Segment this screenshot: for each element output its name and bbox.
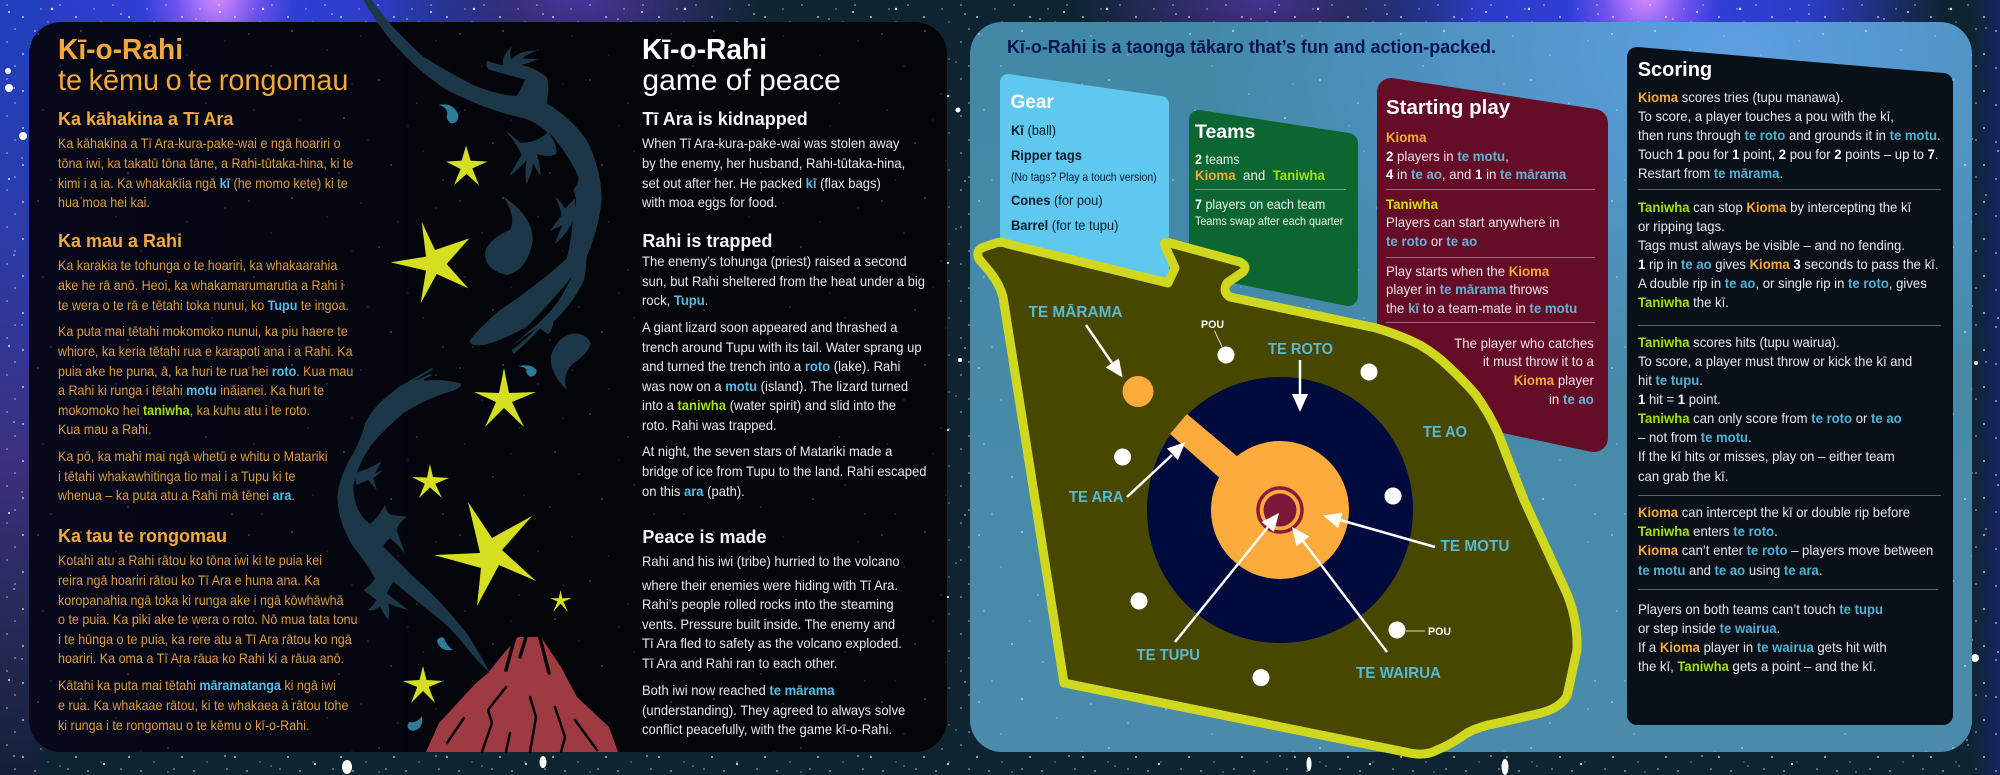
card: gear: Kī (ball) xyxy=(1010,122,1056,138)
card: scoring: Taniwha enters te roto. xyxy=(1638,523,1777,539)
English story text: Tī Ara and Rahi ran to each other. xyxy=(642,655,838,671)
heading: English title xyxy=(642,34,841,97)
card: scoring: Kioma scores tries (tupu manawa). xyxy=(1638,89,1843,105)
English story text: Rahi and his iwi (tribe) hurried to the volcano xyxy=(642,553,900,569)
card: scoring: Scoring xyxy=(1638,59,1712,81)
card: teams xyxy=(1189,110,1358,306)
card: scoring: Touch 1 pou for 1 point, 2 pou for 2 points – up to 7. xyxy=(1638,146,1938,162)
English story text: Tī Ara fled to safety as the volcano exploded. xyxy=(642,635,902,651)
heading: Māori title: Kī-o-Rahi xyxy=(58,34,183,66)
card: scoring: Kioma can’t enter te roto – players move between xyxy=(1638,542,1933,558)
card: starting play xyxy=(1377,78,1608,452)
card: scoring: – not from te motu. xyxy=(1638,429,1751,445)
te tupu centre xyxy=(1264,494,1296,526)
te marama circle xyxy=(1122,376,1154,407)
Māori story text: i te hūnga o te puia, ka rere atu a Tī Ara rātou ko ngā xyxy=(58,631,352,647)
area labels: TE WAIRUA xyxy=(1356,665,1441,682)
te motu island xyxy=(1211,441,1349,579)
heading: Māori title: te kēmu o te rongomau xyxy=(58,64,348,97)
card: starting play: The player who catches xyxy=(1454,334,1594,350)
heading: English title: Kī-o-Rahi xyxy=(642,34,767,66)
English story text: At night, the seven stars of Matariki made a xyxy=(642,443,893,459)
field boundary xyxy=(978,242,1577,754)
Māori story text: Ka tau te rongomau xyxy=(58,526,227,546)
English story text: When Tī Ara-kura-pake-wai was stolen away xyxy=(642,135,900,151)
Māori story text: hua moa hei kai. xyxy=(58,194,150,210)
English story text: where their enemies were hiding with Tī Ara. xyxy=(642,577,898,593)
heading: Māori title xyxy=(58,34,348,97)
card: starting play: Taniwha xyxy=(1386,196,1438,212)
card: starting play: Kioma player xyxy=(1514,372,1594,388)
English story text: Rahi is trapped xyxy=(642,231,772,251)
area labels: TE TUPU xyxy=(1136,647,1200,664)
intro heading: Kī-o-Rahi is a taonga tākaro that’s fun and action-packed. xyxy=(1007,37,1496,57)
heading: English title: game of peace xyxy=(642,64,841,97)
Māori story text: whenua – ka puta atu a Rahi mā tēnei ara. xyxy=(58,487,295,503)
card: starting play: it must throw it to a xyxy=(1483,353,1594,369)
Māori story text: Ka pō, ka mahi mai ngā whetū e whitu o Matariki xyxy=(58,448,328,464)
card: teams: 2 teams xyxy=(1195,151,1240,167)
area labels: TE MOTU xyxy=(1440,538,1510,555)
English story text: trench around Tupu with its tail. Water sprang up xyxy=(642,339,922,355)
stars xyxy=(391,146,572,703)
English story text: Both iwi now reached te mārama xyxy=(642,682,835,698)
Māori story text: te wera o te rā e tētahi toka nunui, ko Tupu te ingoa. xyxy=(58,297,349,313)
illustration: lizards, stars and volcano xyxy=(337,0,618,754)
card: scoring: If a Kioma player in te wairua gets hit with xyxy=(1638,639,1886,655)
Māori story text: e rua. Ka whakaae rātou, ki te whakaea ā rātou tohe xyxy=(58,697,348,713)
card: teams: Teams swap after each quarter xyxy=(1195,214,1343,228)
card: scoring: 1 rip in te ao gives Kioma 3 seconds to pass the kī. xyxy=(1638,256,1938,272)
card: scoring: then runs through te roto and grounds it in te motu. xyxy=(1638,127,1940,143)
area labels: TE ARA xyxy=(1069,489,1124,506)
Māori story text: Kātahi ka puta mai tētahi māramatanga ki ngā iwi xyxy=(58,677,336,693)
Māori story text: koropanahia ngā toka ki runga ake i ngā kōwhāwhā xyxy=(58,592,344,608)
Māori story text: i tētahi whakawhitinga tio mai i a Tupu ki te xyxy=(58,468,296,484)
card: gear xyxy=(1000,74,1169,278)
English story text: rock, Tupu. xyxy=(642,292,709,308)
card: starting play: Kioma xyxy=(1386,129,1426,145)
te roto lake xyxy=(1147,377,1413,643)
Māori story text: ki runga i te rongomau o te kēmu o kī-o-Rahi. xyxy=(58,717,309,733)
English story text: Peace is made xyxy=(642,527,766,547)
Māori story text: Ka kāhakina a Tī Ara xyxy=(58,109,233,129)
card: gear: Cones (for pou) xyxy=(1010,192,1102,208)
pou labels: POU xyxy=(1428,626,1451,638)
card: scoring: hit te tupu. xyxy=(1638,372,1703,388)
left edge glow xyxy=(0,0,42,774)
card: scoring: the kī, Taniwha gets a point – and the kī. xyxy=(1638,658,1876,674)
English story text: sun, but Rahi sheltered from the heat under a big xyxy=(642,273,925,289)
English story text: set out after her. He packed kī (flax bags) xyxy=(642,175,881,191)
playing field diagram xyxy=(973,238,1582,759)
area labels: TE ROTO xyxy=(1268,341,1333,358)
area labels: TE AO xyxy=(1423,424,1467,441)
card: gear: Ripper tags xyxy=(1010,147,1081,163)
Māori story text: Ka karakia te tohunga o te hoariri, ka whakaarahia xyxy=(58,257,337,273)
Māori story text: Ka mau a Rahi xyxy=(58,231,182,251)
panel: Kī-o-Rahi story xyxy=(29,22,947,752)
English story text: (understanding). They agreed to always solve xyxy=(642,702,906,718)
card: scoring: 1 hit = 1 point. xyxy=(1638,391,1720,407)
te wairua ring xyxy=(1258,488,1302,532)
card: teams: 7 players on each team xyxy=(1195,196,1325,212)
card: scoring xyxy=(1627,47,1953,725)
upper lizard xyxy=(363,0,602,402)
card: scoring: If the kī hits or misses, play on – either team xyxy=(1638,448,1894,464)
card: teams: Kioma and Taniwha xyxy=(1195,167,1325,183)
Māori story text: puia ake he puna, ā, ka huri te rua hei roto. Kua mau xyxy=(58,363,353,379)
English story text: conflict peacefully, with the game kī-o-Rahi. xyxy=(642,721,893,737)
Māori story text: Kua mau a Rahi. xyxy=(58,421,151,437)
Māori story text xyxy=(58,109,358,733)
card: starting play: Play starts when the Kioma xyxy=(1386,262,1549,278)
volcano xyxy=(426,637,618,752)
card: scoring: To score, a player must throw or kick the kī and xyxy=(1638,353,1912,369)
card: scoring: Taniwha can stop Kioma by intercepting the kī xyxy=(1638,199,1911,215)
card: teams: Teams xyxy=(1195,121,1255,143)
Māori story text: Ka puta mai tētahi mokomoko nunui, ka piu haere te xyxy=(58,323,348,339)
English story text: Tī Ara is kidnapped xyxy=(642,109,808,129)
card: scoring: Tags must always be visible – and no fending. xyxy=(1638,237,1905,253)
English story text: into a taniwha (water spirit) and slid into the xyxy=(642,397,896,413)
English story text: and turned the trench into a roto (lake). Rahi xyxy=(642,358,901,374)
card: scoring: Players on both teams can’t touch te tupu xyxy=(1638,601,1883,617)
water drops xyxy=(438,104,537,377)
Māori story text: hoariri. Ka oma a Tī Ara rāua ko Rahi ki a rāua anō. xyxy=(58,650,344,666)
English story text: The enemy’s tohunga (priest) raised a second xyxy=(642,253,907,269)
star dust on panel xyxy=(978,30,1972,752)
Māori story text: mokomoko hei taniwha, ka kuhu atu i te roto. xyxy=(58,402,310,418)
English story text: with moa eggs for food. xyxy=(642,194,778,210)
card: scoring: A double rip in te ao, or single rip in te roto, gives xyxy=(1638,275,1926,291)
te ara path xyxy=(1170,414,1238,480)
card: scoring: can grab the kī. xyxy=(1638,468,1728,484)
faint star dust xyxy=(37,30,947,752)
Māori story text: reira ngā hoariri rātou ko Tī Ara e huna ana. Ka xyxy=(58,572,320,588)
card: starting play: in te ao xyxy=(1549,391,1594,407)
card: scoring: Restart from te mārama. xyxy=(1638,165,1783,181)
area labels xyxy=(1028,304,1510,682)
card: starting play: te roto or te ao xyxy=(1386,233,1477,249)
card: starting play: the kī to a team-mate in te motu xyxy=(1386,300,1577,316)
Māori story text: Ka kāhakina a Tī Ara-kura-pake-wai e ngā hoariri o xyxy=(58,135,341,151)
English story text: vents. Pressure built inside. The enemy and xyxy=(642,616,895,632)
English story text: by the enemy, her husband, Rahi-tūtaka-hina, xyxy=(642,155,906,171)
card: starting play: Starting play xyxy=(1386,96,1510,119)
card: scoring: Taniwha the kī. xyxy=(1638,294,1729,310)
pointer arrows xyxy=(1086,325,1435,652)
card: scoring: or ripping tags. xyxy=(1638,218,1724,234)
card: starting play: 4 in te ao, and 1 in te mārama xyxy=(1386,166,1566,182)
area labels: TE MĀRAMA xyxy=(1028,304,1122,321)
card: scoring: Taniwha can only score from te roto or te ao xyxy=(1638,410,1901,426)
English story text xyxy=(642,109,927,737)
Māori story text: a Rahi ki runga i tētahi motu ināianei. Ka huri te xyxy=(58,382,324,398)
card: starting play: player in te mārama throws xyxy=(1386,281,1549,297)
Māori story text: Kotahi atu a Rahi rātou ko tōna iwi ki te puia kei xyxy=(58,552,322,568)
English story text: bridge of ice from Tupu to the land. Rahi escaped xyxy=(642,463,927,479)
Māori story text: whiore, ka keria tētahi rua e karapoti ana i a Rahi. Ka xyxy=(58,343,353,359)
card: gear: (No tags? Play a touch version) xyxy=(1010,170,1156,184)
English story text: Rahi’s people rolled rocks into the steaming xyxy=(642,596,894,612)
card: gear: Barrel (for te tupu) xyxy=(1010,217,1118,233)
lower water drops xyxy=(408,637,453,731)
Māori story text: o te puia. Ka piki ake te wera o roto. Nō mua tata tonu xyxy=(58,611,358,627)
card: scoring: Taniwha scores hits (tupu wairua). xyxy=(1638,334,1839,350)
card: scoring: te motu and te ao using te ara. xyxy=(1638,562,1822,578)
English story text: was now on a motu (island). The lizard turned xyxy=(642,378,908,394)
card: starting play: 2 players in te motu, xyxy=(1386,148,1509,164)
card: scoring: Kioma can intercept the kī or double rip before xyxy=(1638,504,1910,520)
Māori story text: kimi i a ia. Ka whakakīia ngā kī (he momo kete) ki te xyxy=(58,175,348,191)
card: gear: Gear xyxy=(1010,92,1054,113)
English story text: roto. Rahi was trapped. xyxy=(642,417,777,433)
Māori story text: tōna iwi, ka takatū tōna tāne, a Rahi-tūtaka-hina, ki te xyxy=(58,155,353,171)
panel: how to play xyxy=(970,22,1972,752)
pou labels: POU xyxy=(1201,319,1224,331)
English story text: on this ara (path). xyxy=(642,483,745,499)
English story text: A giant lizard soon appeared and thrashed a xyxy=(642,319,898,335)
pou markers xyxy=(1114,346,1406,686)
lower lizard xyxy=(337,380,490,673)
pou labels xyxy=(1201,319,1451,638)
card: scoring: To score, a player touches a pou with the kī, xyxy=(1638,108,1894,124)
card: starting play: Players can start anywhere in xyxy=(1386,214,1560,230)
Māori story text: ake he rā anō. Heoi, ka whakamarumarutia a Rahi i xyxy=(58,277,344,293)
card: scoring: or step inside te wairua. xyxy=(1638,620,1780,636)
